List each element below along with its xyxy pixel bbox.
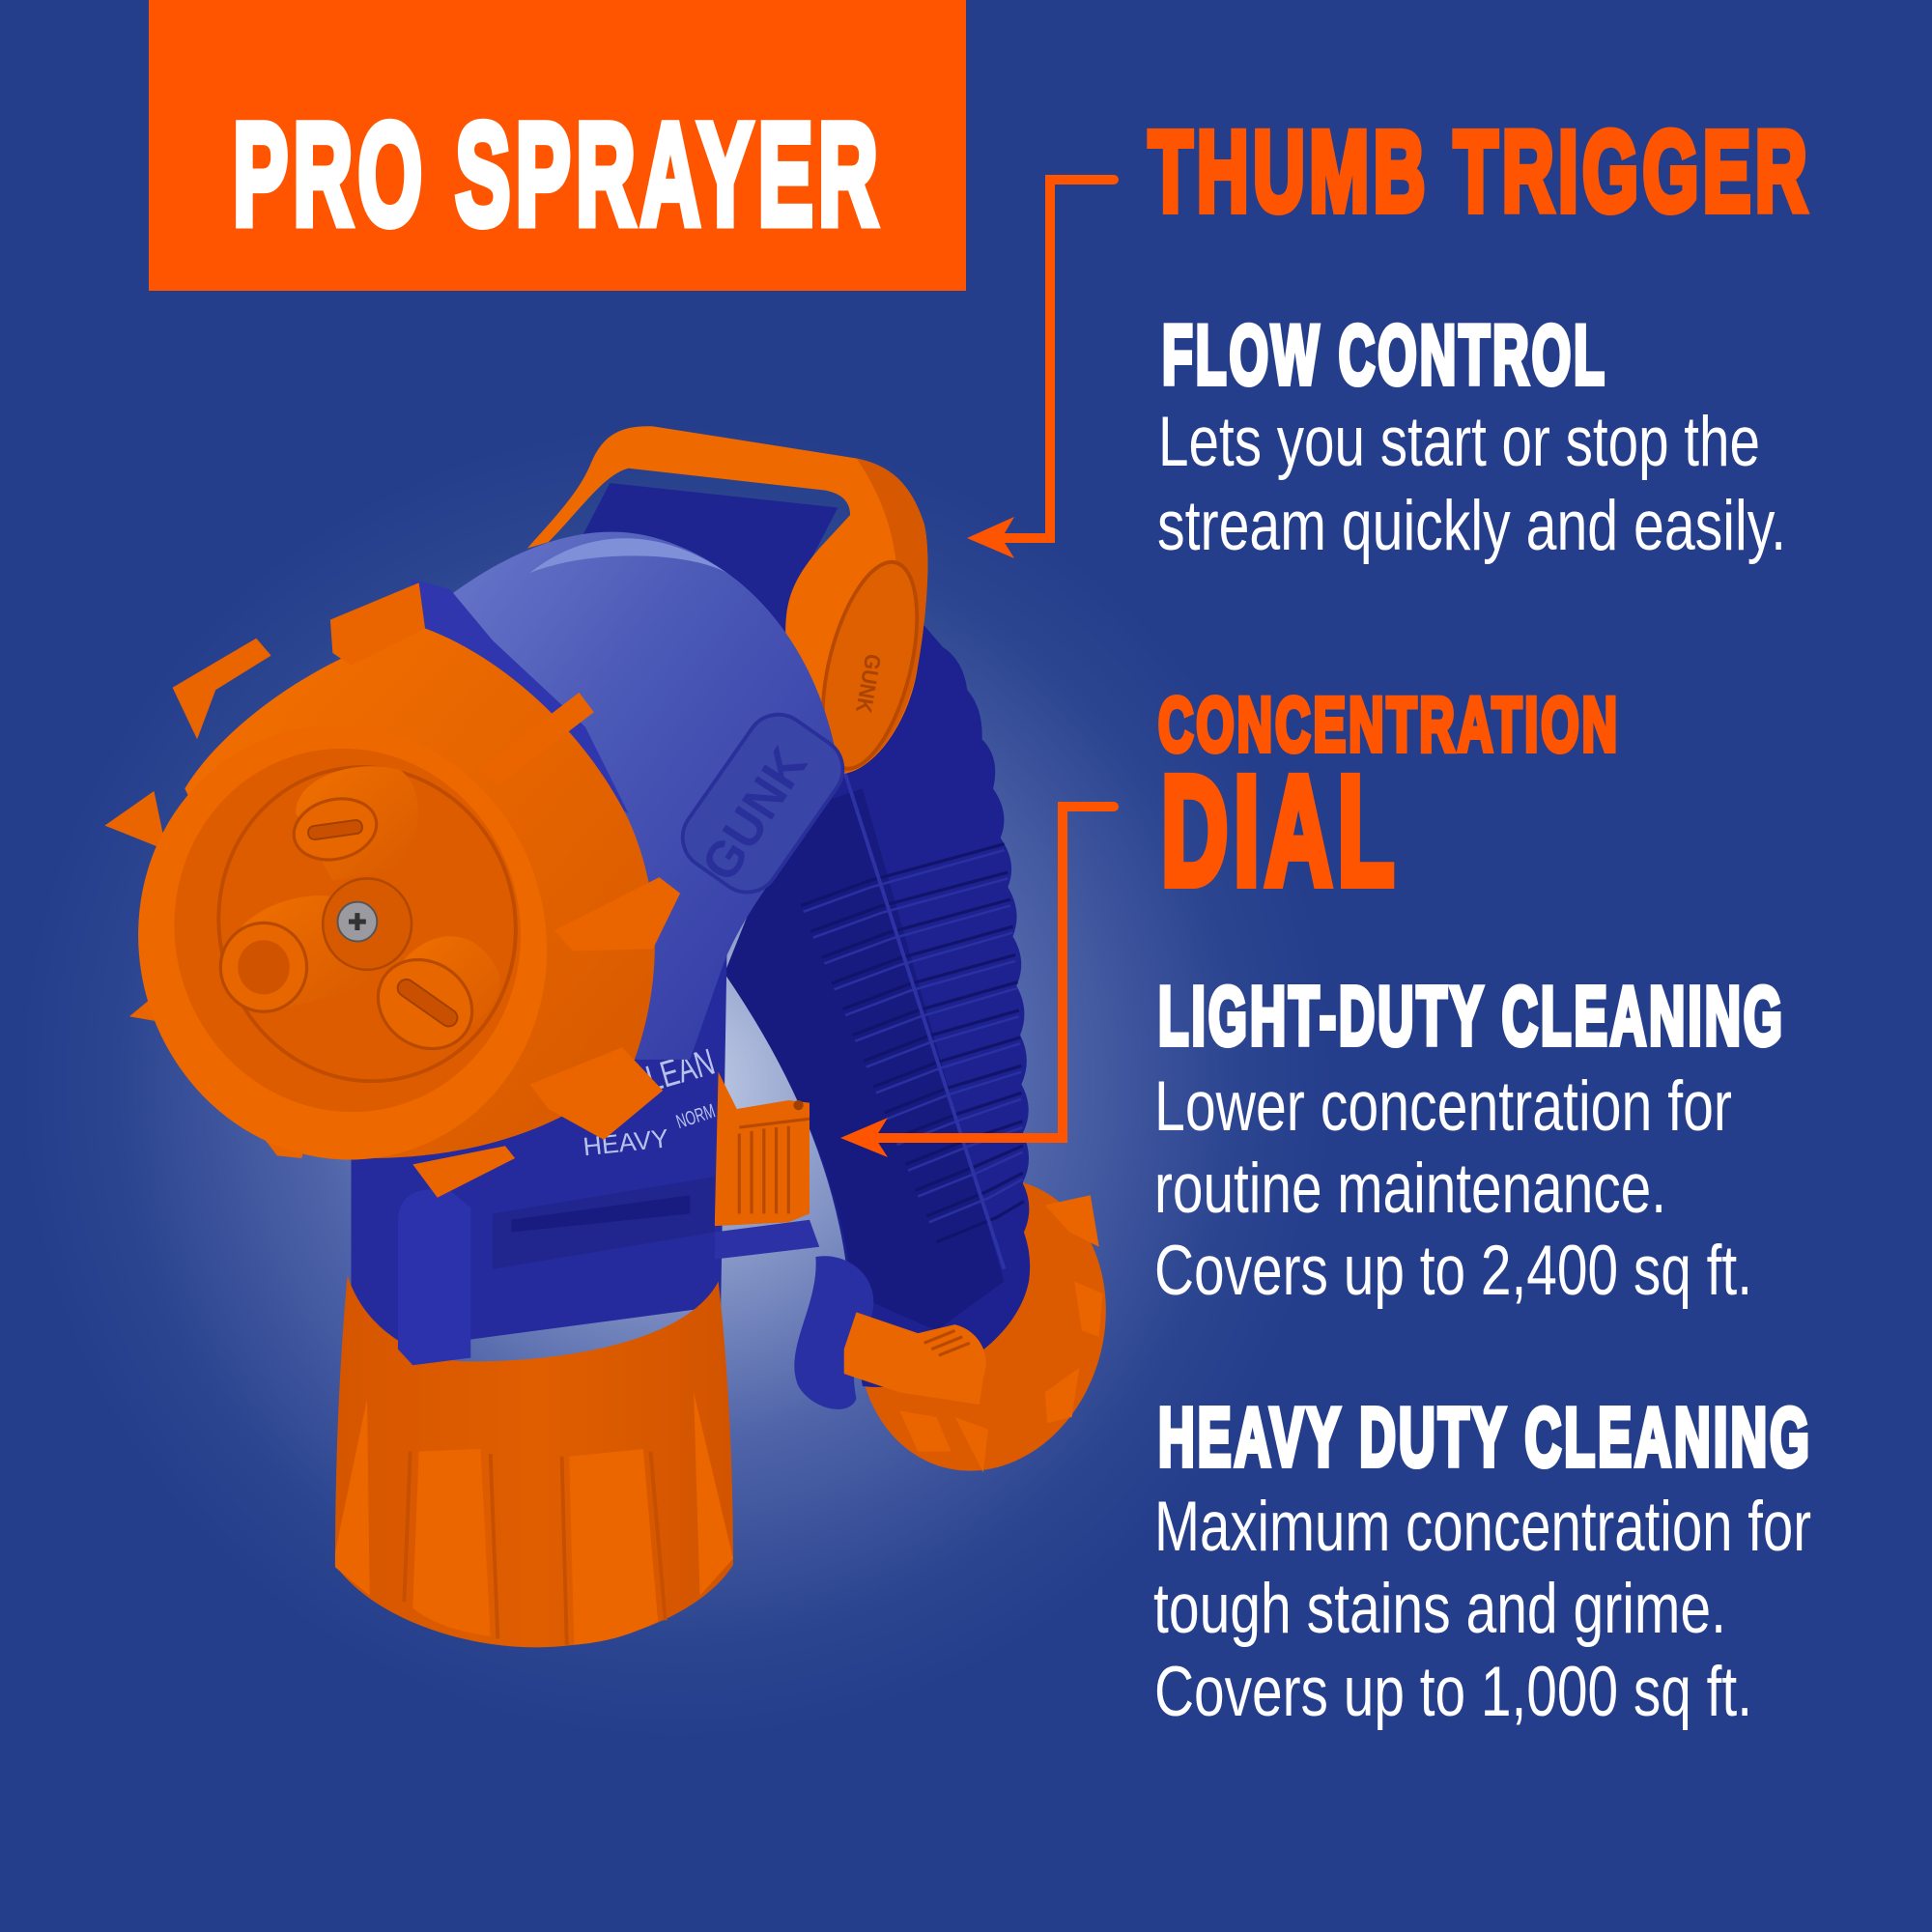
text block: heavy duty cleaning: tough stains and grime.	[1153, 1570, 1726, 1648]
spray head teeth	[104, 582, 680, 1198]
product illustration: sprayer	[90, 426, 1138, 1647]
thumb trigger loop: GUNK	[851, 652, 886, 715]
blue clip on base	[398, 1189, 470, 1365]
nozzles	[220, 766, 499, 1066]
title banner: PRO SPRAYER	[233, 93, 883, 255]
text block: light-duty cleaning	[1154, 971, 1785, 1310]
text block: heavy duty cleaning	[1153, 1392, 1812, 1731]
body lettering: HEAVY	[582, 1123, 670, 1161]
heading: concentration dial	[1158, 681, 1620, 917]
text block: heavy duty cleaning: Covers up to 1,000 sq ft.	[1154, 1653, 1752, 1731]
hanging strap loop	[794, 1256, 873, 1409]
GUNK plaque	[670, 702, 855, 905]
text block: flow control: Lets you start or stop the	[1158, 403, 1760, 481]
text block: light-duty cleaning: routine maintenance.	[1154, 1150, 1666, 1228]
leader arrow: concentration dial	[840, 807, 1114, 1157]
spray head body	[185, 629, 655, 1158]
dial slot	[493, 1177, 715, 1269]
grip handle	[724, 604, 1030, 1387]
text block: flow control: FLOW CONTROL	[1162, 309, 1607, 402]
thumb trigger loop	[527, 426, 935, 778]
blue trigger backing	[579, 483, 838, 690]
elbow body	[411, 532, 838, 1060]
hose connector ring	[826, 1151, 1138, 1499]
text block: light-duty cleaning: Covers up to 2,400 sq ft.	[1154, 1232, 1752, 1310]
hose clip	[844, 1312, 986, 1405]
GUNK plaque: GUNK	[692, 738, 818, 891]
title banner	[149, 0, 966, 291]
text block: flow control	[1157, 309, 1786, 565]
spray head face	[90, 679, 595, 1206]
concentration dial lever	[715, 1072, 819, 1260]
heading: concentration dial: DIAL	[1161, 744, 1400, 917]
body lettering: LEAN	[641, 1041, 720, 1100]
leader arrow: thumb trigger	[967, 180, 1114, 558]
body lettering	[582, 1041, 720, 1161]
body lettering: NORM	[674, 1101, 718, 1133]
heading: concentration dial: CONCENTRATION	[1158, 681, 1620, 767]
lower body	[352, 949, 727, 1355]
text block: light-duty cleaning: Lower concentration for	[1154, 1067, 1732, 1146]
orange base cap	[335, 1275, 733, 1647]
